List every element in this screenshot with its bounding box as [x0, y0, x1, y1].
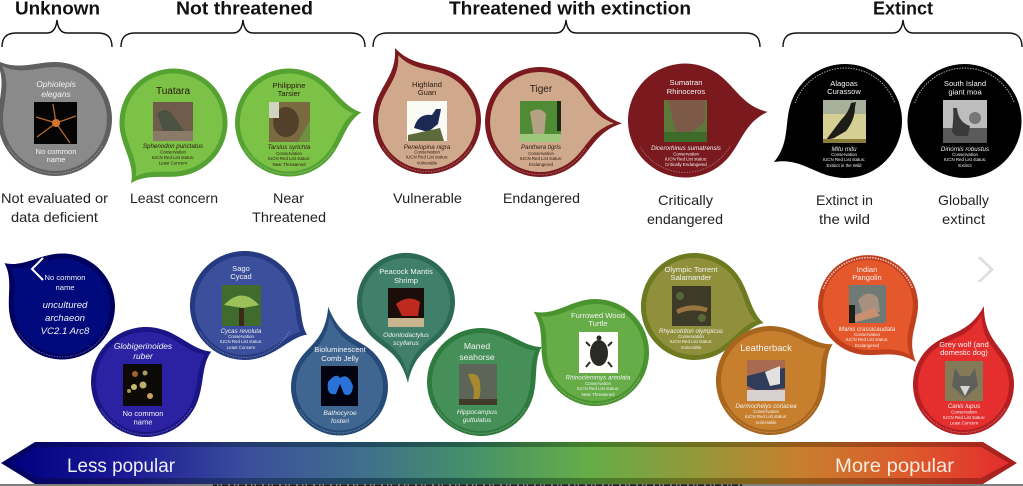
- badge: Tuatara: Least Concern: [159, 160, 188, 166]
- photo: curassow: [823, 100, 866, 143]
- badge: Leatherback: Vulnerable: [756, 420, 777, 425]
- bracket: Threatened with extinction: [373, 20, 760, 47]
- badge: Tiger: Endangered: [529, 162, 554, 167]
- badge: Tiger: Conservation: [528, 151, 554, 156]
- badge: uncultured archaeon: name: [56, 283, 74, 292]
- photo: leatherback: [747, 360, 785, 401]
- label: Near Threatened: [252, 190, 326, 225]
- badge: Globigerinoides ruber: ruber: [133, 351, 154, 361]
- badge: Furrowed Wood Turtle: IUCN Red List status:: [577, 386, 619, 391]
- label: Vulnerable: Vulnerable: [393, 190, 462, 206]
- badge: Tiger: IUCN Red List status:: [520, 156, 562, 161]
- badge: Globigerinoides ruber: No common: [123, 409, 163, 418]
- badge: Tuatara: IUCN Red List status:: [152, 155, 194, 160]
- badge: Peacock Mantis Shrimp: Peacock Mantis: [379, 267, 433, 276]
- badge: Ophiolepis elegans: [0, 20, 136, 200]
- badge: Leatherback: Leatherback: [740, 342, 792, 353]
- badge: Tuatara: [87, 47, 249, 214]
- badge: Leatherback: Conservation: [753, 409, 779, 414]
- photo: brittle star: [34, 102, 77, 144]
- badge: Peacock Mantis Shrimp: [356, 252, 457, 384]
- photo: mantis shrimp: [388, 288, 424, 327]
- badge: Highland Guan: Penelopina nigra: [404, 144, 451, 151]
- badge: Sago Cycad: Sago: [232, 264, 250, 273]
- badge: Highland Guan: Guan: [418, 88, 436, 97]
- badge: Olympic Torrent Salamander: IUCN Red List status:: [670, 339, 712, 344]
- photo: guan: [407, 101, 447, 141]
- badge: Grey wolf: Conservation: [951, 410, 977, 414]
- badge: uncultured archaeon: VC2.1 Arc8: [41, 326, 90, 337]
- photo: pangolin: [849, 285, 886, 323]
- badge: Alagoas Curassow: Mitu mitu: [831, 146, 857, 153]
- badge: Olympic Torrent Salamander: [630, 242, 776, 375]
- badge: Ophiolepis elegans: No common: [36, 147, 76, 156]
- badge: Ophiolepis elegans: elegans: [41, 89, 71, 99]
- badge: South Island giant moa: giant moa: [948, 88, 982, 96]
- badge: Bioluminescent Comb Jelly: Bioluminescent: [314, 345, 367, 354]
- badge: Bioluminescent Comb Jelly: Bathocyroe: [323, 410, 357, 417]
- badge: Alagoas Curassow: Extinct in the Wild: [827, 163, 862, 168]
- badge: Tuatara: Sphenodon punctatus: [143, 143, 203, 150]
- badge: Sago Cycad: [172, 233, 330, 384]
- bracket: Unknown: [2, 20, 112, 47]
- badge: Tiger: [484, 66, 623, 178]
- badge: Indian Pangolin: [798, 235, 954, 394]
- badge: Olympic Torrent Salamander: Rhyacotriton olympicus: [659, 328, 723, 335]
- badge: uncultured archaeon: archaeon: [45, 313, 85, 324]
- badge: Highland Guan: Highland: [412, 80, 442, 89]
- badge: Grey wolf: domestic dog): [940, 348, 988, 357]
- badge: uncultured archaeon: uncultured: [43, 300, 88, 311]
- badge: Sumatran Rhinoceros: IUCN Red List status:: [665, 156, 707, 162]
- photo: salamander: [672, 286, 711, 326]
- photo: turtle: [579, 332, 618, 373]
- badge: Peacock Mantis Shrimp: scyllarus: [393, 340, 420, 347]
- photo: wolf: [945, 361, 983, 401]
- photo: tiger: [520, 101, 561, 142]
- label: Critically endangered: Critically: [658, 192, 713, 208]
- badge: Peacock Mantis Shrimp: Shrimp: [394, 276, 418, 285]
- badge: Grey wolf: [902, 293, 1023, 446]
- photo: moa: [943, 100, 987, 143]
- badge: Bioluminescent Comb Jelly: [280, 300, 394, 442]
- label: Extinct in the wild: the wild: [819, 211, 870, 227]
- badge: South Island giant moa: Conservation: [952, 152, 978, 157]
- badge: Furrowed Wood Turtle: Rhinoclemmys areolata: [566, 374, 631, 382]
- badge: Peacock Mantis Shrimp: Odontodactylus: [383, 332, 430, 339]
- badge: Maned seahorse: Maned: [464, 341, 490, 351]
- label: Least concern: Least concern: [130, 190, 218, 206]
- badge: Leatherback: Dermochelys coriacea: [735, 403, 797, 410]
- badge: Tuatara: Conservation: [160, 150, 186, 154]
- popularity strip cut off at page bottom: [0, 484, 1023, 486]
- badge: Olympic Torrent Salamander: Salamander: [671, 273, 712, 282]
- badge: Grey wolf: Grey wolf (and: [939, 340, 989, 349]
- badge: Philippine Tarsier: Philippine: [273, 81, 305, 90]
- badge: Tiger: Panthera tigris: [521, 144, 561, 151]
- badge: Globigerinoides ruber: Globigerinoides: [114, 341, 173, 351]
- badge: Indian Pangolin: Pangolin: [852, 273, 882, 282]
- badge: Olympic Torrent Salamander: Conservation: [678, 334, 704, 339]
- badge: Globigerinoides ruber: [73, 302, 234, 455]
- badge: Alagoas Curassow: IUCN Red List status:: [823, 157, 865, 162]
- badge: Indian Pangolin: IUCN Red List status:: [846, 337, 888, 342]
- label: Globally extinct: Globally: [938, 192, 989, 208]
- label: Not evaluated or data deficient: [1, 190, 108, 225]
- label: Near Threatened: Threatened: [252, 209, 326, 225]
- photo: foraminifera: [123, 364, 162, 406]
- icon: next chevron: [978, 257, 993, 282]
- badge: Alagoas Curassow: [745, 43, 923, 211]
- badge: Maned seahorse: [407, 300, 569, 456]
- badge: Alagoas Curassow: Alagoas: [830, 79, 858, 88]
- badge: Sumatran Rhinoceros: Critically Endangered: [665, 162, 707, 167]
- badge: Sago Cycad: Conservation: [228, 334, 254, 339]
- badge: South Island giant moa: IUCN Red List status:: [944, 157, 986, 162]
- text: less popular: Less popular: [67, 456, 176, 477]
- badge: Highland Guan: Conservation: [414, 150, 440, 154]
- badge: South Island giant moa: Dinornis robustus: [941, 146, 989, 153]
- label: Extinct in the wild: Extinct in: [816, 192, 873, 208]
- badge: Alagoas Curassow: Curassow: [827, 87, 861, 96]
- badge: uncultured archaeon: [0, 221, 136, 381]
- badge: uncultured archaeon: No common: [45, 273, 85, 282]
- badge: Indian Pangolin: Manis crassicaudata: [839, 326, 896, 333]
- badge: Sago Cycad: Least Concern: [227, 345, 256, 350]
- label: Critically endangered: endangered: [647, 211, 723, 227]
- label: Not evaluated or data deficient: data deficient: [11, 209, 98, 225]
- badge: South Island giant moa: South Island: [944, 79, 986, 88]
- badge: Alagoas Curassow: Conservation: [831, 152, 857, 157]
- badge: Sumatran Rhinoceros: Dicerorhinus sumatrensis: [651, 145, 721, 152]
- arrow: popularity scale: [1, 442, 1017, 484]
- photo: tarsier: [269, 102, 310, 142]
- badge: Leatherback: [696, 297, 860, 455]
- badge: Furrowed Wood Turtle: Near Threatened: [581, 392, 615, 397]
- badge: Philippine Tarsier: [228, 59, 369, 183]
- badge: Philippine Tarsier: Near Threatened: [272, 162, 306, 167]
- badge: Philippine Tarsier: Tarsier: [278, 89, 301, 98]
- badge: Sago Cycad: Cycas revoluta: [221, 328, 262, 335]
- badge: Leatherback: IUCN Red List status:: [745, 414, 787, 419]
- label: Endangered: Endangered: [503, 190, 580, 206]
- badge: Tuatara: Tuatara: [156, 86, 190, 97]
- badge: Maned seahorse: Hippocampus: [457, 409, 498, 416]
- badge: Indian Pangolin: Indian: [857, 265, 877, 274]
- badge: South Island giant moa: [908, 64, 1022, 178]
- badge: Grey wolf: Canis lupus: [948, 403, 980, 410]
- badge: Ophiolepis elegans: Ophiolepis: [36, 79, 77, 89]
- badge: Philippine Tarsier: Conservation: [276, 151, 302, 156]
- badge: Bioluminescent Comb Jelly: fosteri: [331, 418, 350, 425]
- badge: Globigerinoides ruber: name: [134, 418, 152, 426]
- photo: comb jelly: [321, 366, 358, 406]
- badge: South Island giant moa: Extinct: [958, 163, 972, 168]
- badge: Furrowed Wood Turtle: Furrowed Wood: [571, 311, 625, 320]
- badge: Sago Cycad: IUCN Red List status:: [220, 339, 262, 344]
- badge: Furrowed Wood Turtle: [504, 267, 670, 427]
- badge: Highland Guan: Vulnerable: [417, 160, 438, 166]
- badge: Maned seahorse: guttulatus: [463, 417, 492, 424]
- badge: Ophiolepis elegans: name: [46, 155, 66, 164]
- label: Not evaluated or data deficient: Not evaluated or: [1, 190, 108, 206]
- text: more popular: More popular: [835, 456, 955, 477]
- photo: cycad: [222, 285, 261, 326]
- badge: Sumatran Rhinoceros: Rhinoceros: [667, 87, 705, 96]
- badge: Philippine Tarsier: Tarsius syrichta: [268, 144, 311, 151]
- badge: Highland Guan: IUCN Red List status:: [406, 154, 448, 160]
- badge: Grey wolf: Least Concern: [950, 420, 979, 426]
- badge: Furrowed Wood Turtle: Conservation: [585, 381, 611, 386]
- photo: seahorse: [459, 364, 497, 405]
- badge: Tiger: Tiger: [530, 84, 553, 95]
- badge: Furrowed Wood Turtle: Turtle: [588, 319, 608, 328]
- label: Globally extinct: [938, 192, 989, 227]
- badge: Olympic Torrent Salamander: Olympic Torrent: [664, 265, 718, 274]
- badge: Grey wolf: IUCN Red List status:: [943, 415, 985, 420]
- icon: previous chevron: [32, 258, 43, 280]
- label: Globally extinct: extinct: [942, 211, 985, 227]
- badge: Sumatran Rhinoceros: [622, 55, 774, 183]
- photo: rhinoceros: [664, 100, 707, 142]
- photo: tuatara: [153, 102, 193, 141]
- bracket: Extinct: [783, 20, 1022, 47]
- badge: Highland Guan: [346, 26, 498, 191]
- badge: Bioluminescent Comb Jelly: Comb Jelly: [321, 354, 359, 363]
- bracket: Not threatened: [121, 20, 365, 47]
- label: Extinct in the wild: [816, 192, 873, 227]
- badge: Olympic Torrent Salamander: Vulnerable: [681, 345, 702, 350]
- label: Near Threatened: Near: [273, 190, 304, 206]
- badge: Indian Pangolin: Conservation: [854, 332, 880, 337]
- badge: Sago Cycad: Cycad: [230, 272, 252, 281]
- badge: Philippine Tarsier: IUCN Red List status:: [268, 156, 310, 161]
- badge: Indian Pangolin: Endangered: [855, 343, 880, 348]
- label: Critically endangered: [647, 192, 723, 227]
- badge: Sumatran Rhinoceros: Sumatran: [670, 78, 702, 87]
- badge: Sumatran Rhinoceros: Conservation: [673, 152, 699, 156]
- badge: Maned seahorse: seahorse: [459, 352, 495, 362]
